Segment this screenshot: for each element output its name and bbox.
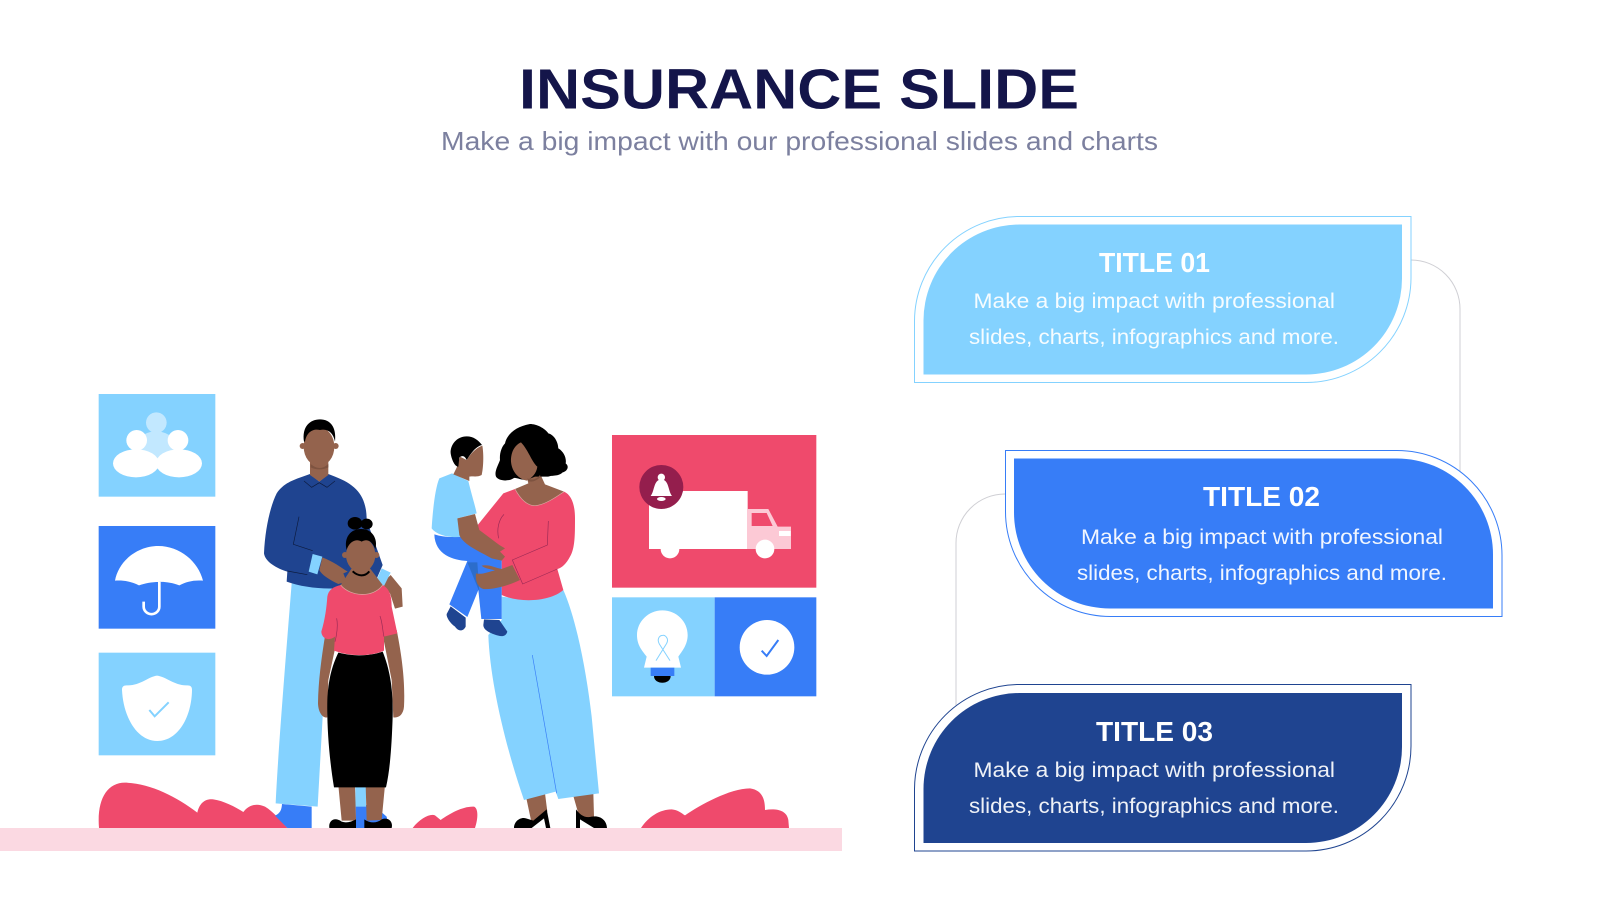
panel: title 02: Make a big impact with professional: [1081, 526, 1443, 549]
icon tile: truck and bell: [612, 435, 816, 588]
panel: title 01: TITLE 01: [1099, 247, 1210, 278]
panel: title 02: [1006, 450, 1502, 616]
title: INSURANCE SLIDE: [519, 58, 1079, 122]
bush: right: [641, 788, 789, 828]
icon tile: light bulb: [612, 597, 715, 696]
panel: title 02: slides, charts, infographics and more.: [1077, 562, 1447, 585]
panel: title 01: Make a big impact with professional: [974, 290, 1335, 313]
panel: title 03: slides, charts, infographics and more.: [969, 795, 1339, 818]
figure: man: [264, 419, 403, 828]
subtitle: Make a big impact with our professional slides and charts: [441, 126, 1158, 156]
panel: title 01: [914, 216, 1411, 382]
figure: woman upper body holding child: [432, 424, 575, 636]
figure: woman lower body: [488, 590, 607, 828]
left illustration group: [99, 394, 404, 828]
panel: title 02: TITLE 02: [1203, 481, 1320, 512]
figure: girl: [318, 517, 404, 828]
panel: title 01: slides, charts, infographics and more.: [969, 326, 1339, 349]
bush: centre: [413, 807, 477, 828]
icon tile: umbrella: [99, 526, 215, 629]
bush: left: [99, 783, 287, 828]
connector: card 2 to card 3: [956, 494, 1005, 712]
connector: card 1 to card 2: [1411, 260, 1460, 480]
panel: title 03: Make a big impact with professional: [974, 759, 1335, 782]
right illustration group: [413, 435, 816, 828]
icon tile: people: [99, 394, 215, 497]
icon tile: shield: [99, 653, 215, 755]
ground strip: [0, 828, 842, 851]
panel: title 03: [914, 684, 1411, 851]
icon tile: check mark: [715, 597, 816, 696]
panel: title 03: TITLE 03: [1096, 716, 1213, 747]
